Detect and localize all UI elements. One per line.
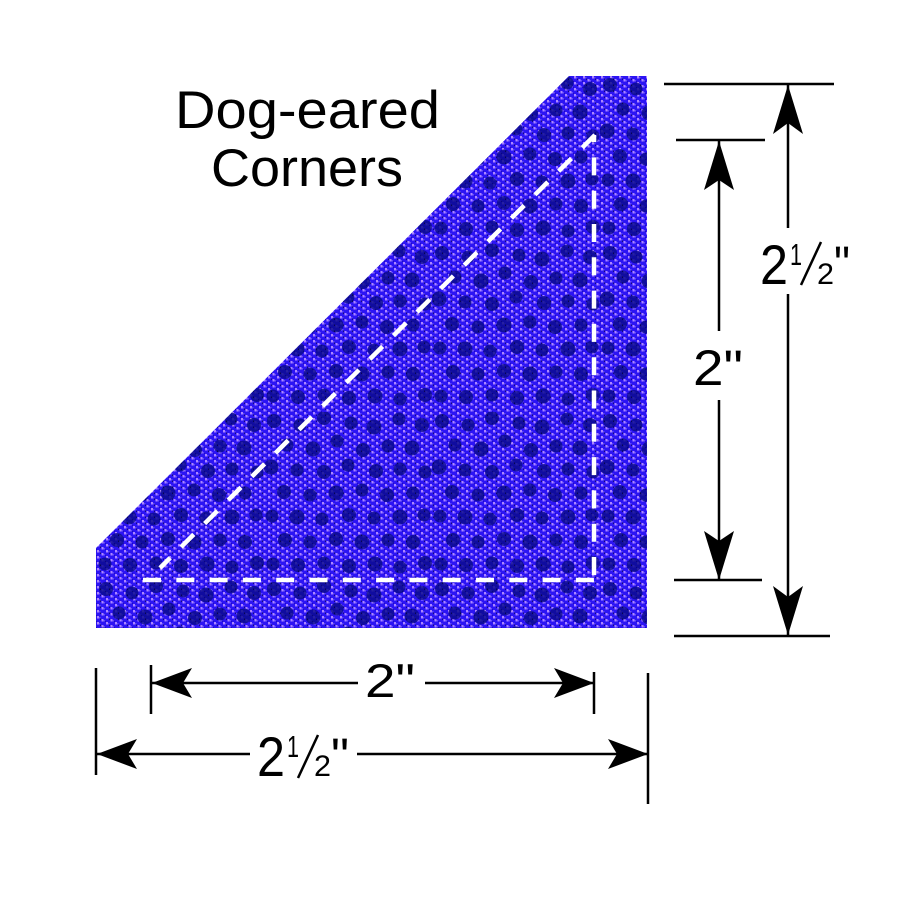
dimension: outer height 2 1/2 inches: " [834,236,850,292]
dimension: outer width 2 1/2 inches: 2 [314,750,331,783]
dimension: outer width 2 1/2 inches: " [331,728,349,784]
dimension: outer height 2 1/2 inches: 2 [817,258,834,291]
dimension: outer height 2 1/2 inches: 1 [790,237,802,272]
dimension: outer height 2 1/2 inches [664,84,850,636]
dimension: inner height 2 inches [674,140,765,580]
dimension: outer width 2 1/2 inches: 1 [287,729,299,764]
dimension: inner width 2 inches: 2" [365,654,415,707]
title: Dog-eared [175,81,440,140]
title [175,81,440,198]
dimension: inner width 2 inches [151,654,594,714]
dimension: outer width 2 1/2 inches [96,668,648,804]
title: Corners [211,139,403,198]
dimension: outer width 2 1/2 inches: 2 [257,725,285,788]
white dashed stitching line [143,135,595,580]
panel: fabric piece [96,76,647,628]
dimension: inner height 2 inches: 2" [693,340,743,396]
dimension: outer height 2 1/2 inches: 2 [760,233,788,296]
